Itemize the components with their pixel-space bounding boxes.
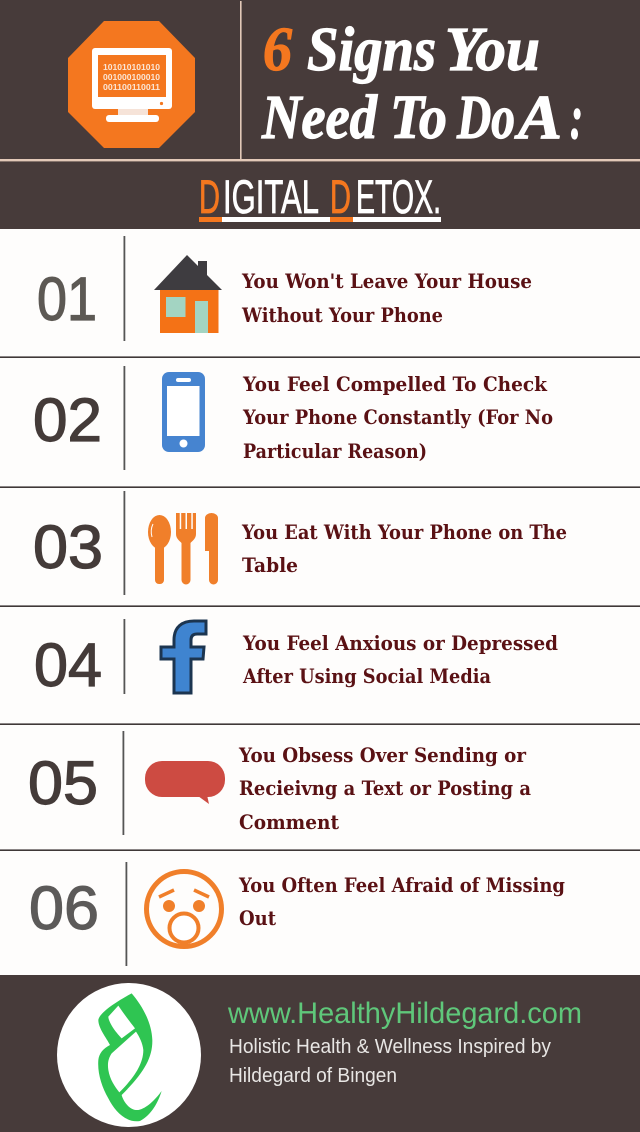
icon: monitor in orange octagon: 101010101010: [103, 62, 160, 72]
subtitle: digital detox: [199, 170, 441, 223]
panel: sign 02: 02: [33, 386, 102, 454]
panel: sign 03: 03: [33, 513, 103, 581]
icon: house: [154, 255, 222, 333]
text: sign 03: [241, 520, 567, 577]
panel: sign 06: [29, 862, 565, 966]
panel: footer: [0, 975, 640, 1132]
icon: shocked face: [146, 872, 222, 946]
text: sign 02: Particular Reason): [243, 439, 427, 463]
text: sign 02: [242, 372, 553, 463]
text: sign 01: [241, 269, 532, 327]
panel: sign 04: 04: [34, 631, 102, 699]
icon: facebook f: [161, 621, 206, 693]
text: sign 05: You Obsess Over Sending or: [238, 743, 526, 767]
text: sign 05: [238, 743, 531, 834]
text: sign 02: Your Phone Constantly (For No: [242, 405, 553, 429]
icon: speech bubble: [145, 761, 225, 804]
text: sign 05: Comment: [239, 810, 340, 834]
text: sign 05: Recieivng a Text or Posting a: [239, 776, 531, 800]
icon: monitor in orange octagon: 001100110011: [103, 82, 160, 92]
panel: sign 01: 01: [37, 265, 97, 333]
panel: sign 02: [33, 366, 553, 470]
title: Do: [456, 84, 515, 152]
panel: sign 01: [37, 236, 532, 341]
subtitle: digital detox: D: [330, 170, 351, 223]
icon: spoon, fork and knife: [148, 513, 218, 584]
icon: smartphone: [162, 372, 205, 452]
text: sign 06: [238, 873, 565, 930]
subtitle: digital detox: IGITAL: [223, 170, 319, 223]
footer website: www.HealthyHildegard.com: [227, 997, 582, 1030]
panel: sign 04: [34, 619, 558, 699]
icon: monitor in orange octagon: [68, 21, 195, 148]
text: sign 01: You Won't Leave Your House: [241, 269, 532, 293]
title: Signs: [307, 16, 436, 84]
title: To: [390, 84, 447, 152]
text: sign 01: Without Your Phone: [241, 303, 443, 327]
text: sign 06: You Often Feel Afraid of Missing: [238, 873, 565, 897]
subtitle: digital detox: ETOX.: [356, 170, 441, 223]
panel: sign 06: 06: [29, 874, 99, 942]
title: You: [445, 16, 540, 84]
text: sign 04: After Using Social Media: [242, 664, 491, 688]
text: sign 04: You Feel Anxious or Depressed: [242, 631, 558, 655]
panel: sign 03: [33, 491, 567, 595]
panel: sign 05: 05: [28, 749, 98, 817]
text: sign 04: [242, 631, 558, 688]
title: [261, 16, 583, 152]
title: A: [514, 84, 562, 152]
title: Need: [261, 84, 378, 152]
panel: sign 05: [28, 731, 531, 835]
text: sign 06: Out: [239, 906, 277, 930]
icon: monitor in orange octagon: 001000100010: [103, 72, 160, 82]
subtitle: digital detox: D: [199, 170, 220, 223]
title: 6: [263, 16, 292, 84]
panel: header: [0, 0, 640, 229]
footer tagline: Hildegard of Bingen: [229, 1065, 397, 1087]
text: sign 02: You Feel Compelled To Check: [242, 372, 548, 396]
footer tagline: [229, 1036, 551, 1087]
footer tagline: Holistic Health & Wellness Inspired by: [229, 1036, 551, 1058]
text: sign 03: Table: [242, 553, 298, 577]
logo: green letterform in white circle: [57, 983, 201, 1127]
title: :: [570, 84, 583, 152]
text: sign 03: You Eat With Your Phone on The: [241, 520, 567, 544]
